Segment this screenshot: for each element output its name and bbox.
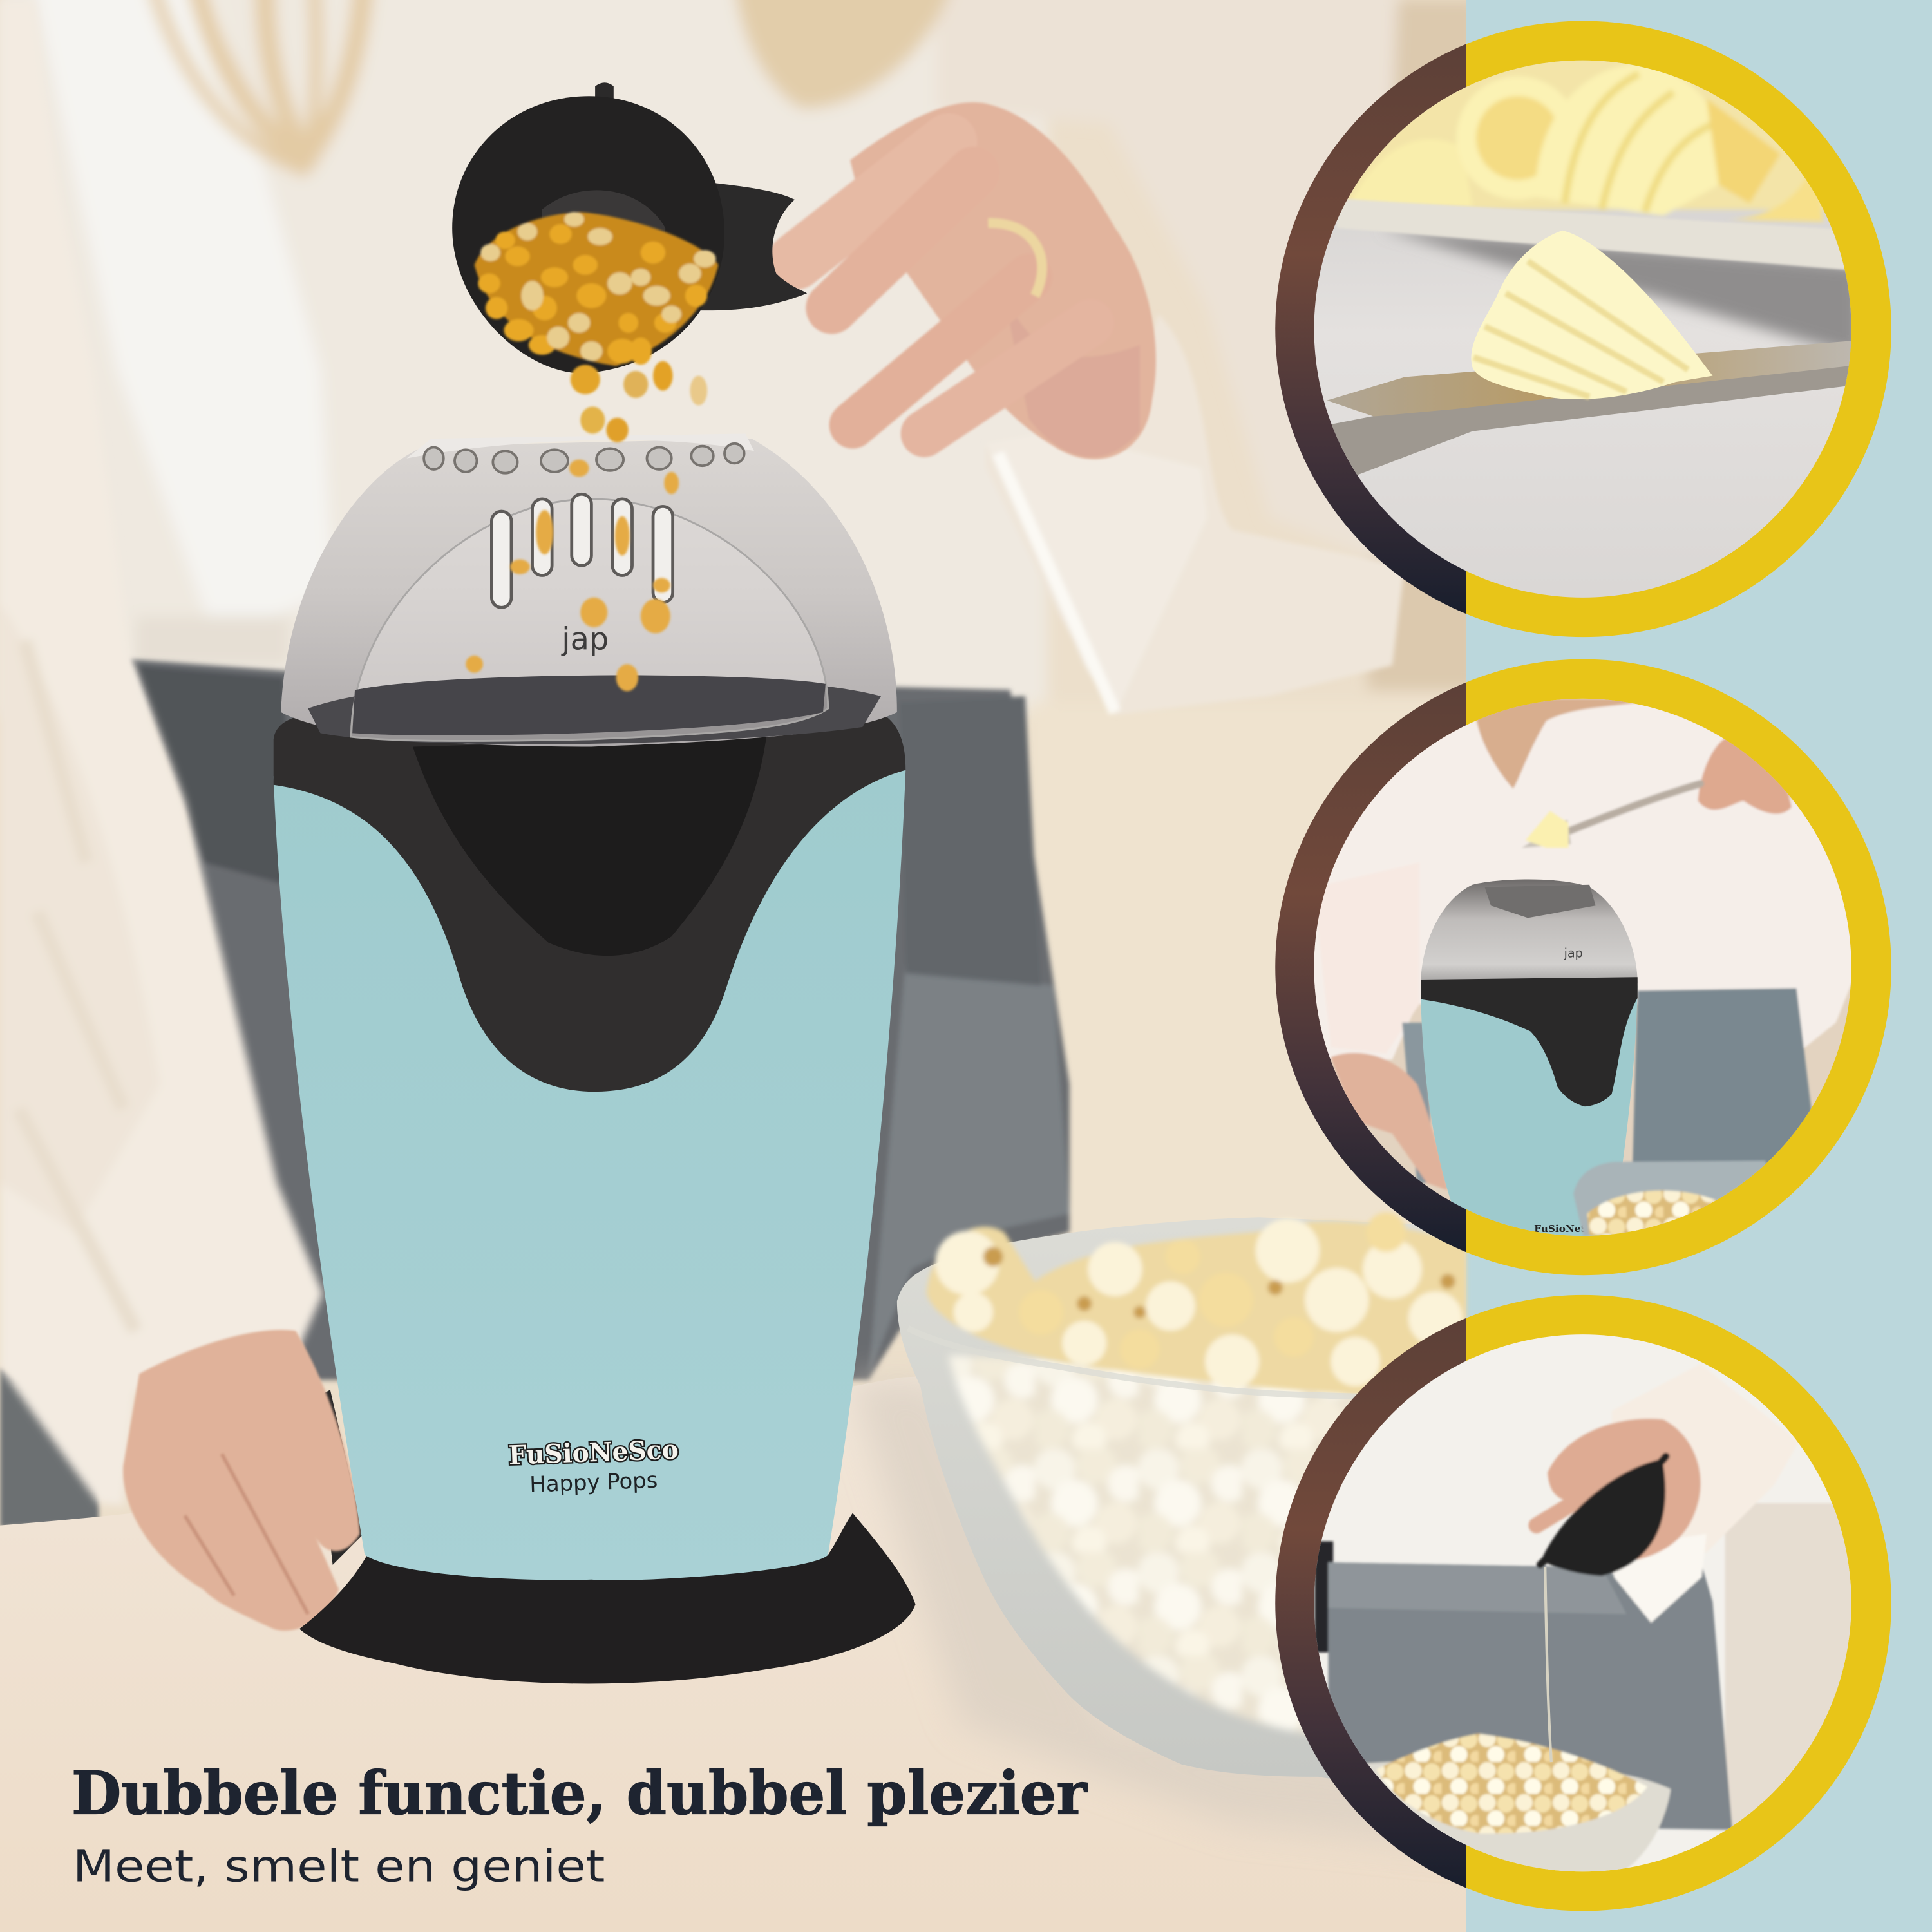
teal body [274,770,905,1580]
brand logo: FuSioNeSco [508,1435,679,1471]
hair [1475,699,1658,788]
hand with knife [1698,735,1792,814]
scoop handle [700,182,807,310]
upper wall corner [1368,0,1479,690]
popcorn bowl [1367,1760,1671,1885]
foot tab behind hand [314,1390,363,1565]
hand [1548,1419,1701,1562]
clear dome [281,433,897,746]
knife [1318,340,1861,480]
melted butter stream [1545,1567,1551,1762]
mini machine: jap [1564,946,1583,961]
black scoop [1541,1459,1665,1576]
blouse hem [135,616,290,665]
finger 4 [924,323,1090,433]
rim holes [424,444,744,473]
corn kernels [475,212,718,366]
butter curl [1471,231,1712,399]
pouring photo [1306,1331,1861,1885]
background butter [1306,50,1861,222]
table top [0,1343,1466,1932]
scoop with corn kernels [452,82,807,442]
dome inner base [308,676,881,744]
blouse [1306,696,1861,1072]
circle 3: pouring butter on popcorn [1275,1295,1891,1911]
falling kernels in dome [466,460,679,691]
cardigan right side [936,0,1399,567]
base foot [299,1513,916,1683]
hand: right hand holding scoop [796,102,1156,459]
hair left [154,0,363,166]
blouse [0,0,1047,715]
right colour panel [1466,0,1932,1932]
white popcorn fill [949,1356,1466,1738]
brand logo: Happy Pops [529,1468,658,1497]
butter photo [1306,50,1861,616]
ring [1275,659,1891,1275]
jeans [1633,988,1811,1164]
grey wood band [1380,228,1861,357]
ring [1275,1295,1891,1911]
hand: left hand on base [123,1330,360,1631]
product: popcorn machine [274,433,916,1683]
popcorn pieces [935,1218,1463,1388]
cream worktop wall [1029,703,1472,1257]
melting butter photo [1306,690,1861,1244]
right sleeve [986,314,1405,715]
mini machine: FuSioNeSco [1534,1223,1600,1235]
black collar [274,707,905,1092]
dome inner chute [351,499,828,741]
jeans waistband [1328,1562,1627,1614]
plate [1337,198,1861,274]
circle 1: butter curl on knife [1275,21,1891,637]
hair right [733,0,955,108]
wall right [1725,1503,1861,1873]
sleeve [1612,1364,1799,1553]
scoop cup [452,96,724,374]
falling kernels [571,361,707,442]
photo background: kitchen scene [0,0,1479,1932]
jeans [1328,1540,1732,1830]
wall [0,0,1466,1525]
golden popcorn heap [927,1213,1466,1399]
dome top rim [406,433,754,459]
finger 2 [831,173,973,308]
glass bowl [897,1217,1466,1780]
finger 1 [796,142,949,261]
mini machine [1421,880,1638,1236]
cuff [1614,1534,1707,1623]
bowl rim highlight [908,1328,1466,1399]
mini bowl [1573,1160,1774,1236]
finger 3 [853,277,1029,425]
black strip [1314,1541,1333,1653]
vent slots [491,494,673,607]
subheading: Meet, smelt en geniet [73,1841,605,1893]
dome brand: jap [561,621,609,657]
heading: Dubbele functie, dubbel plezier [71,1758,1088,1828]
scoop knob [595,82,614,108]
brand logo [508,1435,679,1497]
ring [988,223,1042,296]
ring [1275,21,1891,637]
jeans [0,659,1070,1528]
left sleeve [0,0,323,1506]
circle 2: butter over popcorn machine [1275,659,1891,1275]
left hand [1331,1053,1448,1190]
popcorn bowl [897,1213,1466,1780]
chute [413,737,766,956]
